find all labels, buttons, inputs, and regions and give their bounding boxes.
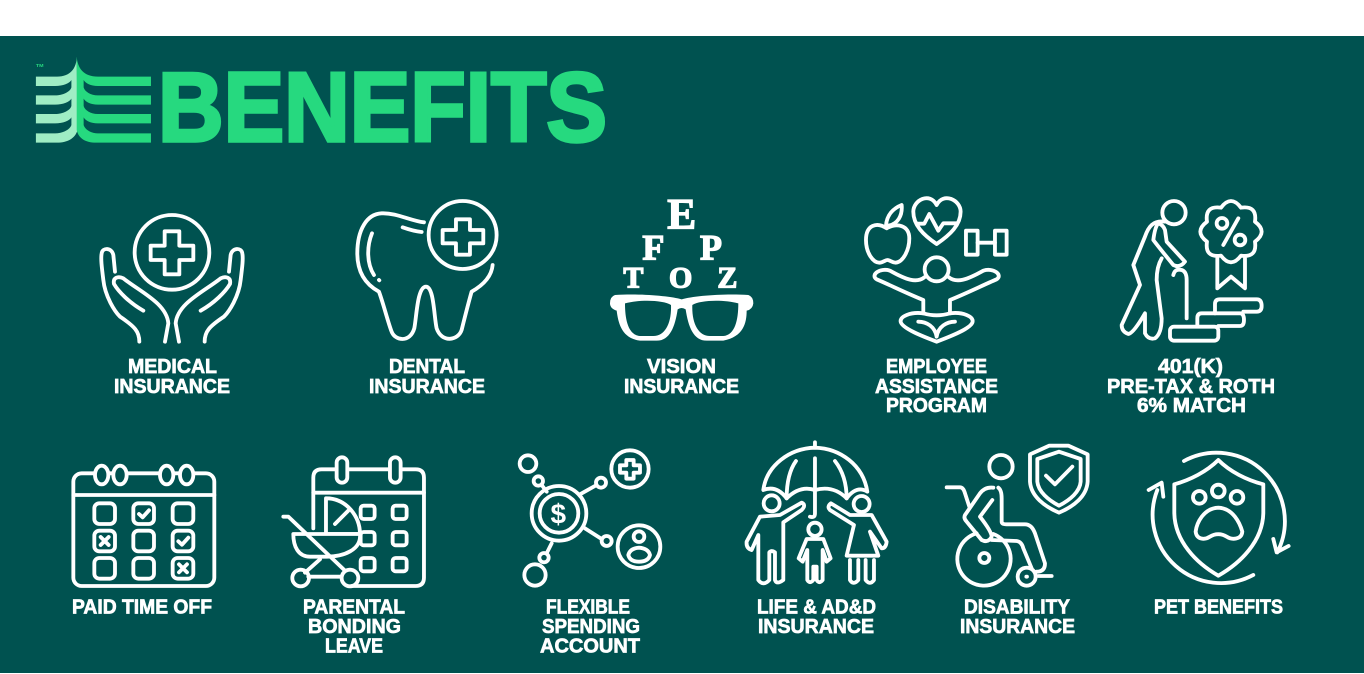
panel: 401(k)	[1107, 201, 1275, 417]
label	[369, 356, 485, 398]
label: INSURANCE	[960, 616, 1075, 638]
panel: life and AD&D insurance	[747, 442, 887, 638]
label: PARENTAL	[303, 596, 405, 618]
icon: family under umbrella	[747, 442, 887, 583]
icon: eye chart and glasses	[610, 190, 753, 341]
title: BENEFITS	[158, 52, 607, 162]
icon: wheelchair user with shield	[947, 446, 1088, 586]
icon: wellness person with apple, heart and dumbbell	[866, 198, 1007, 342]
panel: flexible spending account	[520, 450, 660, 658]
label: VISION	[647, 356, 716, 378]
icon: calendar with baby stroller	[283, 457, 424, 586]
label	[960, 596, 1075, 638]
panel: vision insurance	[610, 190, 753, 398]
panel: parental bonding leave	[283, 457, 424, 658]
panel: paid time off	[72, 466, 214, 618]
label: 401(K)	[1158, 356, 1223, 378]
label	[303, 596, 405, 658]
icon: eye chart and glasses: Z	[717, 261, 737, 294]
panel: employee assistance program	[866, 198, 1007, 417]
label: PRE-TAX & ROTH	[1107, 376, 1275, 398]
label: 6% MATCH	[1137, 395, 1246, 417]
icon: company logo	[36, 57, 151, 143]
icon: eye chart and glasses: O	[669, 261, 692, 294]
label: PAID TIME OFF	[72, 596, 212, 618]
label	[114, 356, 230, 398]
panel: pet benefits	[1149, 453, 1289, 618]
icon: shield with paw and circular arrows	[1149, 453, 1289, 583]
label: PROGRAM	[886, 395, 987, 417]
label: INSURANCE	[369, 376, 485, 398]
label: SPENDING	[542, 616, 640, 638]
icon: hands holding medical cross	[101, 215, 243, 342]
label: ACCOUNT	[540, 636, 640, 658]
label: BONDING	[308, 616, 401, 638]
label: PET BENEFITS	[1154, 596, 1283, 618]
label: INSURANCE	[758, 616, 874, 638]
icon: eye chart and glasses: P	[700, 228, 722, 268]
icon: tooth with cross	[357, 201, 497, 339]
icon: company logo: TM	[36, 63, 44, 69]
label: MEDICAL	[128, 356, 217, 378]
label: LIFE & AD&D	[757, 596, 876, 618]
label: INSURANCE	[114, 376, 230, 398]
label: ASSISTANCE	[875, 376, 998, 398]
icon: eye chart and glasses: T	[623, 261, 643, 294]
label: EMPLOYEE	[886, 356, 987, 378]
label: FLEXIBLE	[546, 596, 630, 618]
icon: eye chart and glasses: E	[667, 190, 696, 238]
label	[875, 356, 998, 417]
panel: dental insurance	[357, 201, 497, 398]
label: INSURANCE	[624, 376, 739, 398]
panel: medical insurance	[101, 215, 243, 398]
icon: eye chart and glasses: F	[642, 228, 664, 268]
label: LEAVE	[325, 636, 383, 658]
label	[1107, 356, 1275, 417]
label: DISABILITY	[964, 596, 1071, 618]
label: DENTAL	[389, 356, 465, 378]
label	[624, 356, 739, 398]
label	[540, 596, 640, 658]
label	[757, 596, 876, 638]
icon: calendar with checkboxes	[73, 466, 214, 586]
icon: dollar hub with connected nodes: $	[551, 499, 567, 530]
icon: older person climbing steps toward percent badge	[1122, 201, 1262, 341]
panel: disability insurance	[947, 446, 1088, 638]
icon: dollar hub with connected nodes	[520, 450, 660, 586]
